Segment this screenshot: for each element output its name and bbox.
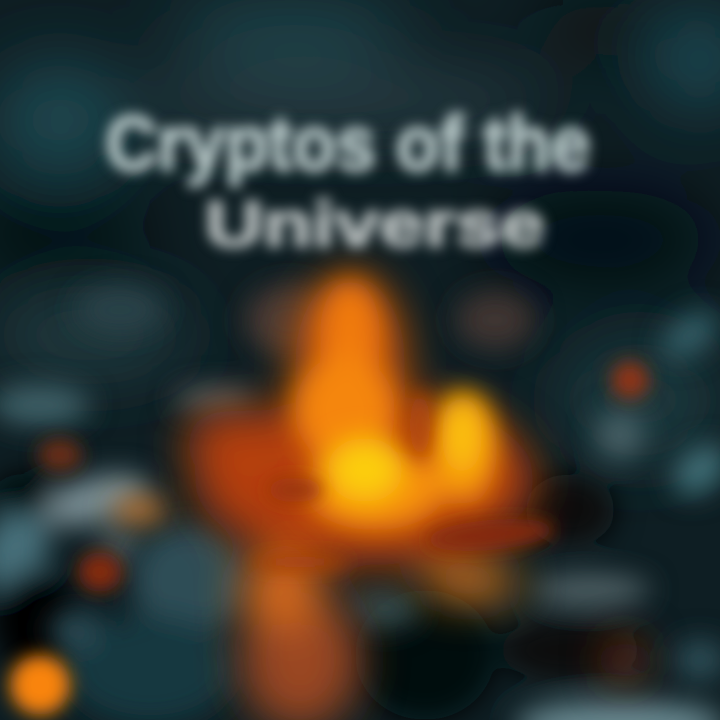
- central fire: orange core: [112, 280, 497, 530]
- scattered debris: teal and grey shards: [0, 284, 720, 720]
- title: two-line blurred heading: Cryptos of the: [106, 99, 590, 187]
- dark teal mound, lower left: [49, 525, 420, 720]
- title: two-line blurred heading: [106, 99, 590, 260]
- icon: glowing orange orb, lower left: [10, 655, 70, 715]
- title: two-line blurred heading: Universe: [205, 188, 545, 260]
- central fire: yellow heart: [327, 395, 482, 502]
- embers: small red sparks: [38, 361, 649, 592]
- central fire: outer red-orange: [185, 275, 643, 720]
- dark red streaks across fire: [250, 391, 556, 569]
